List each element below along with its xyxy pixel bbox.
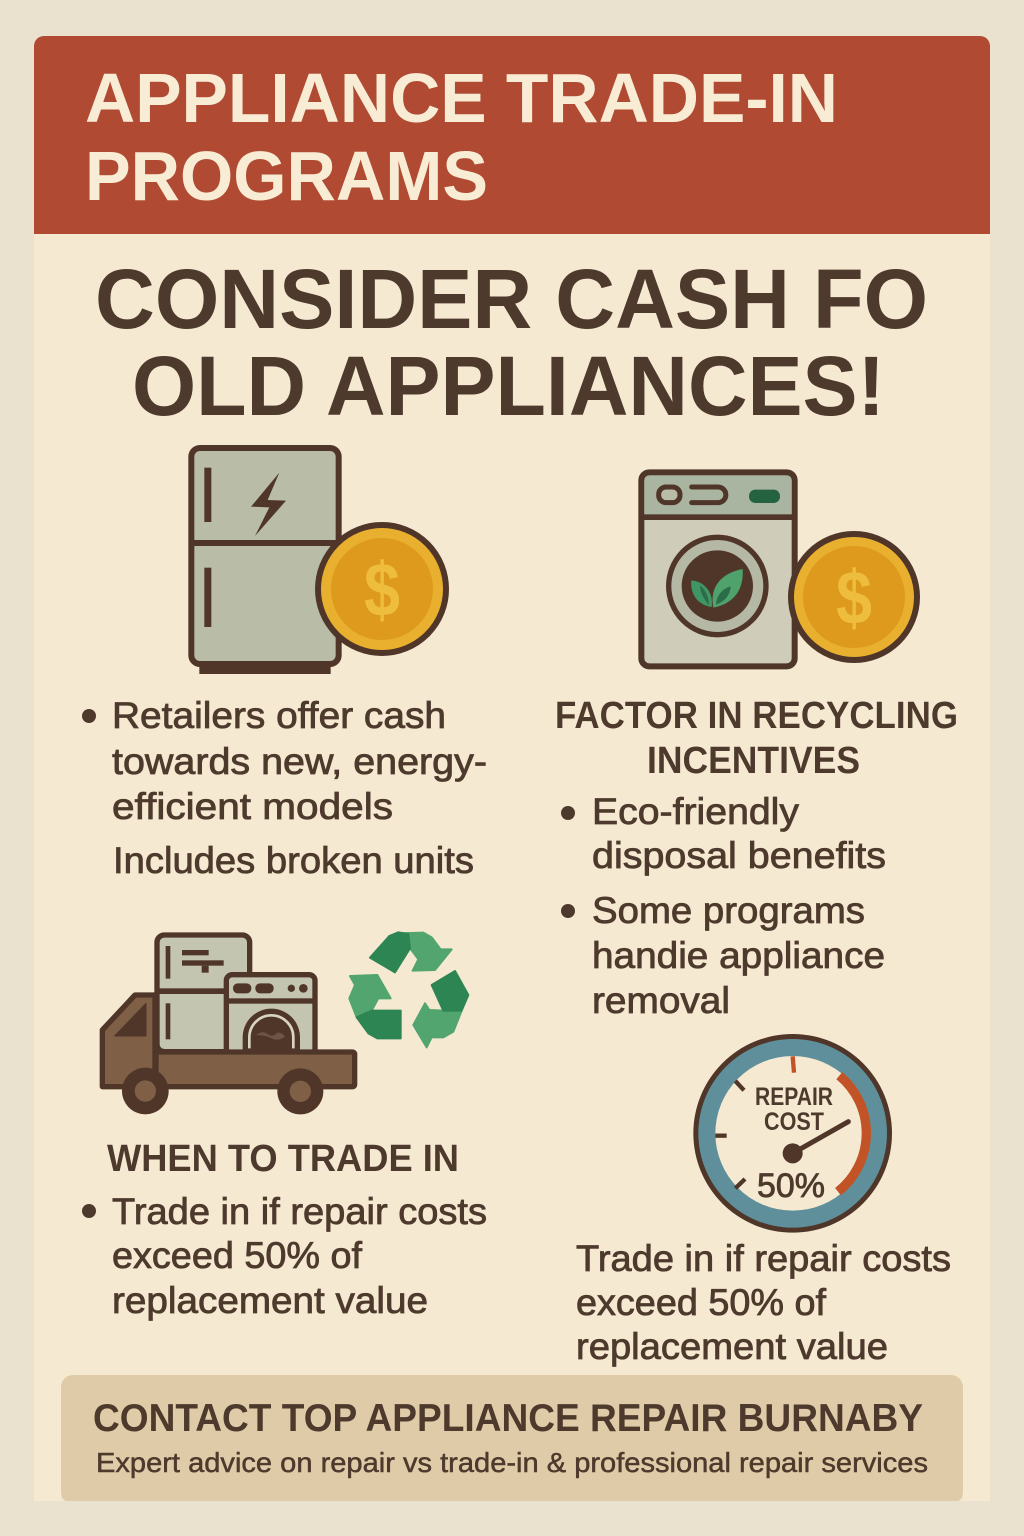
text block: gauge caption: exceed 50% of (576, 1282, 827, 1323)
text block: retailers: Includes broken units (113, 840, 474, 881)
icon: truck carrying appliances (102, 935, 355, 1114)
footer panel: contact (61, 1375, 963, 1501)
header banner (34, 36, 990, 234)
icon: coin: $ (836, 556, 872, 641)
text block: recycling bullets (561, 791, 886, 1021)
text block: retailers (82, 695, 487, 881)
text block: retailers: Retailers offer cash (112, 695, 446, 736)
icon: coin (318, 525, 446, 653)
text block: gauge caption: Trade in if repair costs (576, 1238, 951, 1279)
gauge labels: 50% (757, 1167, 825, 1205)
text block: gauge caption: replacement value (576, 1326, 888, 1367)
text block: when to trade in: Trade in if repair costs (112, 1191, 487, 1232)
text block: retailers: efficient models (112, 786, 393, 827)
heading: when to trade in: WHEN TO TRADE IN (107, 1138, 459, 1180)
icon: coin: $ (364, 548, 400, 633)
icon: washer with coin (641, 472, 917, 666)
banner title: PROGRAMS (85, 137, 488, 215)
icon: repair cost gauge (693, 1034, 892, 1233)
main heading: OLD APPLIANCES! (132, 339, 885, 433)
text block: when to trade in: exceed 50% of (112, 1235, 363, 1276)
icon: recycling arrows (349, 932, 468, 1047)
text block: recycling bullets: Some programs (592, 890, 865, 931)
text block: recycling bullets: removal (592, 980, 730, 1021)
gauge labels (755, 1083, 833, 1205)
text block: recycling bullets: disposal benefits (592, 835, 886, 876)
text block: recycling bullets: Eco-friendly (592, 791, 800, 832)
truck washer (224, 975, 317, 1055)
gauge labels: REPAIR (755, 1083, 833, 1111)
icon: coin (791, 534, 917, 660)
truck body (102, 995, 355, 1087)
main heading: CONSIDER CASH FO (95, 252, 928, 346)
text block: recycling bullets: handie appliance (592, 935, 885, 976)
banner title (85, 59, 838, 215)
main heading (95, 252, 928, 433)
heading: factor in recycling incentives: FACTOR IN RECYCLING (555, 695, 958, 737)
truck wheels (122, 1068, 323, 1114)
heading: factor in recycling incentives: INCENTIVES (647, 740, 860, 782)
icon: fridge (191, 448, 339, 674)
footer subtext: Expert advice on repair vs trade-in & professional repair services (96, 1447, 928, 1478)
footer heading: CONTACT TOP APPLIANCE REPAIR BURNABY (93, 1397, 923, 1440)
banner title: APPLIANCE TRADE-IN (85, 59, 838, 137)
gauge labels: COST (764, 1108, 824, 1136)
truck fridge (155, 935, 252, 1052)
text block: gauge caption (576, 1238, 951, 1367)
text block: retailers: towards new, energy- (112, 741, 487, 782)
text block: when to trade in (82, 1191, 487, 1321)
text block: when to trade in: replacement value (112, 1280, 428, 1321)
icon: fridge with coin (191, 448, 446, 674)
icon: washer (641, 472, 795, 666)
gauge dial (693, 1034, 892, 1233)
heading: factor in recycling incentives (555, 695, 958, 782)
